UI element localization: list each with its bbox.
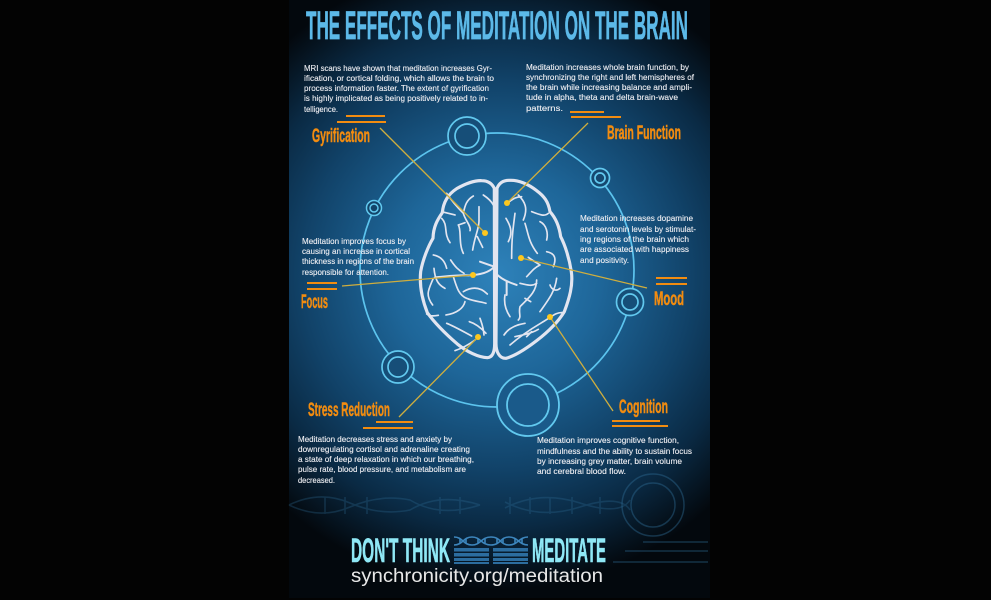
text block: stress reduction: pulse rate, blood pressure, and metabolism are (298, 464, 466, 474)
heading: Stress Reduction: Stress Reduction (308, 400, 390, 421)
text block: brain function: tude in alpha, theta and delta brain-wave (526, 92, 678, 102)
footer url: synchronicity.org/meditation (351, 566, 603, 587)
heading: Brain Function: Brain Function (607, 123, 681, 144)
heading: Brain Function (570, 111, 681, 144)
text block: stress reduction (298, 434, 474, 485)
text block: focus: thickness in regions of the brain (302, 256, 414, 266)
text block: brain function: Meditation increases whole brain function, by (526, 62, 690, 72)
icon: ring right (616, 288, 644, 316)
text block: cognition: mindfulness and the ability to sustain focus (537, 446, 692, 456)
text block: stress reduction: downregulating cortisol and adrenaline creating (298, 444, 470, 454)
icon: ring top left (448, 117, 486, 155)
heading: Stress Reduction (308, 400, 413, 429)
text block: cognition: and cerebral blood flow. (537, 466, 626, 476)
text block: brain function: synchronizing the right and left hemispheres of (526, 72, 695, 82)
orbit circle (360, 133, 634, 407)
heading: Gyrification (312, 115, 386, 147)
text block: gyrification: is highly implicated as being positively related to in- (304, 93, 488, 103)
heading: Gyrification: Gyrification (312, 126, 370, 147)
connector: Focus (342, 275, 473, 286)
text block: stress reduction: decreased. (298, 475, 335, 485)
text block: gyrification: MRI scans have shown that meditation increases Gyr- (304, 63, 492, 73)
text block: focus: Meditation improves focus by (302, 236, 407, 246)
text block: mood: and positivity. (580, 255, 629, 265)
heading: Focus: Focus (301, 292, 328, 313)
connector: Gyrification (380, 128, 485, 233)
connector dots (470, 200, 553, 340)
heading: Cognition: Cognition (619, 397, 668, 418)
text block: stress reduction: a state of deep relaxation in which our breathing, (298, 454, 474, 464)
text block: mood: Meditation increases dopamine (580, 213, 693, 223)
panel: poster background (289, 0, 710, 598)
text block: cognition: by increasing grey matter, brain volume (537, 456, 682, 466)
text: MEDITATE (532, 532, 606, 570)
icon: ring bottom left (382, 351, 414, 383)
text block: gyrification: telligence. (304, 104, 338, 114)
icon: ring bottom (497, 374, 559, 436)
text block: gyrification (304, 63, 494, 114)
text block: cognition (537, 435, 692, 476)
brain illustration (420, 180, 572, 358)
connector: Cognition (550, 317, 613, 411)
text block: stress reduction: Meditation decreases stress and anxiety by (298, 434, 453, 444)
text block: focus: causing an increase in cortical (302, 246, 410, 256)
icon: DNA helix with bars (454, 537, 528, 564)
heading: Mood (654, 277, 687, 310)
connector: Brain Function (507, 123, 588, 203)
heading: Focus (301, 282, 337, 313)
text block: mood: are associated with happiness (580, 244, 689, 254)
heading: Mood: Mood (654, 289, 684, 310)
text block: gyrification: ification, or cortical folding, which allows the brain to (304, 73, 494, 83)
text block: brain function: patterns. (526, 103, 563, 113)
text block: brain function: the brain while increasing balance and ampli- (526, 82, 692, 92)
icon: ring top right (590, 168, 610, 188)
text block: mood: and serotonin levels by stimulat- (580, 224, 696, 234)
text block: brain function (526, 62, 695, 113)
faint rings and lines, lower right (613, 474, 708, 562)
text block: mood: ing regions of the brain which (580, 234, 689, 244)
text: DON'T THINK (351, 532, 450, 570)
connector: Mood (521, 258, 647, 288)
text block: cognition: Meditation improves cognitive function, (537, 435, 679, 445)
heading: Cognition (612, 397, 668, 427)
text block: mood (580, 213, 696, 265)
text block: gyrification: process information faster. The extent of gyrification (304, 83, 489, 93)
icon: ring left (366, 200, 382, 216)
faint DNA background strip (289, 497, 630, 514)
connector: Stress Reduction (399, 337, 478, 417)
text block: focus: responsible for attention. (302, 267, 389, 277)
text block: focus (302, 236, 414, 277)
